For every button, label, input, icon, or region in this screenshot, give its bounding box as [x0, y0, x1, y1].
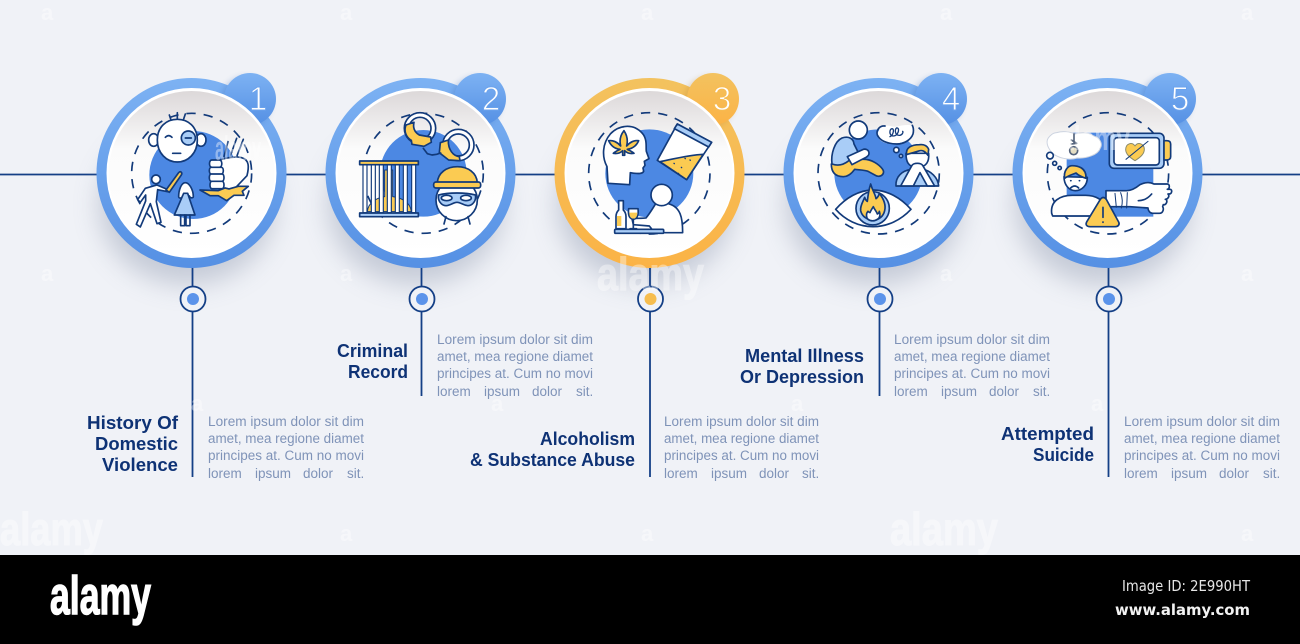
watermarks: alamy: [597, 248, 704, 300]
text block 2: amet, mea regione diamet: [437, 349, 593, 364]
title: Attempted Suicide: [1001, 424, 1094, 465]
text block 2: dolor: [532, 384, 563, 399]
text block 5: ipsum: [1171, 466, 1207, 481]
text block 4: lorem: [894, 384, 928, 399]
text block 2: principes at. Cum no movi: [437, 366, 593, 381]
title: Criminal Record: Criminal: [337, 341, 408, 361]
watermarks: a: [491, 391, 504, 416]
node 3: [638, 286, 663, 312]
text block 5: dolor: [1219, 466, 1250, 481]
text block 2: [437, 332, 593, 399]
title: Mental Illness Or Depression: Mental Illness: [745, 346, 864, 366]
text block 3: principes at. Cum no movi: [664, 448, 819, 463]
text block 1: amet, mea regione diamet: [208, 431, 364, 446]
text block 1: lorem: [208, 466, 242, 481]
watermarks: alamy: [215, 130, 261, 168]
text block 4: Lorem ipsum dolor sit dim: [894, 332, 1050, 347]
title: Alcoholism & Substance Abuse: & Substance Abuse: [470, 450, 635, 470]
watermarks: a: [641, 521, 654, 546]
title: History Of Domestic Violence: History Of: [87, 413, 179, 433]
title: Attempted Suicide: Suicide: [1033, 445, 1094, 465]
text block 3: dolor: [759, 466, 790, 481]
horizontal timeline: [0, 174, 1300, 176]
watermarks: a: [791, 391, 804, 416]
number 4: 4: [942, 80, 960, 117]
text block 2: lorem: [437, 384, 471, 399]
step 2 circle with icon: [326, 73, 516, 396]
title: History Of Domestic Violence: Domestic: [95, 434, 178, 454]
text block 5: amet, mea regione diamet: [1124, 431, 1280, 446]
text block 5: [1124, 414, 1280, 481]
text block 4: principes at. Cum no movi: [894, 366, 1050, 381]
icon: mental illness or depression: [818, 113, 939, 234]
step 4 circle with icon: [784, 73, 974, 396]
node 1: [180, 286, 206, 312]
text block 1: sit.: [347, 466, 364, 481]
text block 3: sit.: [802, 466, 819, 481]
node 2: [410, 286, 434, 312]
watermarks: a: [41, 0, 54, 25]
title: History Of Domestic Violence: [87, 413, 179, 475]
step 1 circle with icon: [96, 73, 286, 477]
watermarks: a: [940, 261, 953, 286]
title: History Of Domestic Violence: Violence: [102, 455, 178, 475]
title: Alcoholism & Substance Abuse: Alcoholism: [540, 429, 635, 449]
text block 3: amet, mea regione diamet: [664, 431, 819, 446]
watermarks: a: [1241, 521, 1254, 546]
text block 3: ipsum: [711, 466, 747, 481]
watermarks: a: [940, 0, 953, 25]
text block 3: Lorem ipsum dolor sit dim: [664, 414, 819, 429]
watermarks: a: [340, 261, 353, 286]
number 5: 5: [1171, 80, 1189, 117]
watermarks: a: [1241, 261, 1254, 286]
step 5 circle with icon: [1012, 73, 1202, 477]
text block 4: amet, mea regione diamet: [894, 349, 1050, 364]
text block 5: Lorem ipsum dolor sit dim: [1124, 414, 1280, 429]
alamy logo: alamy: [50, 566, 151, 626]
icon: criminal record: [360, 113, 483, 233]
text block 1: dolor: [303, 466, 334, 481]
icon: domestic violence: [132, 113, 252, 233]
footer band: [0, 555, 1300, 644]
icon: attempted suicide: [1047, 113, 1172, 234]
website: www.alamy.com: [1115, 601, 1250, 619]
number 3: 3: [713, 80, 731, 117]
text block 2: ipsum: [484, 384, 520, 399]
title: Mental Illness Or Depression: [740, 346, 864, 387]
icon: alcoholism and substance abuse: [589, 113, 712, 234]
text block 1: principes at. Cum no movi: [208, 448, 364, 463]
watermarks: a: [340, 0, 353, 25]
text block 2: Lorem ipsum dolor sit dim: [437, 332, 593, 347]
text block 2: sit.: [576, 384, 593, 399]
image id: Image ID: 2E990HT: [1122, 577, 1251, 595]
text block 1: [208, 414, 364, 481]
number 1: 1: [249, 80, 267, 117]
text block 3: [664, 414, 819, 481]
watermarks: a: [641, 0, 654, 25]
title: Mental Illness Or Depression: Or Depression: [740, 367, 864, 387]
number 2: 2: [482, 80, 500, 117]
title: Criminal Record: [337, 341, 408, 382]
text block 4: ipsum: [941, 384, 977, 399]
text block 1: Lorem ipsum dolor sit dim: [208, 414, 364, 429]
text block 5: principes at. Cum no movi: [1124, 448, 1280, 463]
step 3 circle with icon: [554, 73, 744, 477]
watermarks: a: [41, 261, 54, 286]
text block 4: [894, 332, 1050, 399]
watermarks: a: [1091, 391, 1104, 416]
watermarks: alamy: [0, 503, 103, 555]
watermarks: a: [1241, 0, 1254, 25]
text block 3: lorem: [664, 466, 698, 481]
title: Alcoholism & Substance Abuse: [470, 429, 635, 470]
watermarks: alamy: [1060, 120, 1130, 158]
text block 4: dolor: [989, 384, 1020, 399]
text block 4: sit.: [1033, 384, 1050, 399]
text block 1: ipsum: [255, 466, 291, 481]
title: Attempted Suicide: Attempted: [1001, 424, 1094, 444]
title: Criminal Record: Record: [348, 362, 408, 382]
watermarks: alamy: [890, 503, 998, 555]
watermarks: a: [340, 521, 353, 546]
watermarks: a: [191, 391, 204, 416]
text block 5: lorem: [1124, 466, 1158, 481]
node 4: [868, 286, 892, 312]
node 5: [1096, 286, 1122, 312]
text block 5: sit.: [1263, 466, 1280, 481]
